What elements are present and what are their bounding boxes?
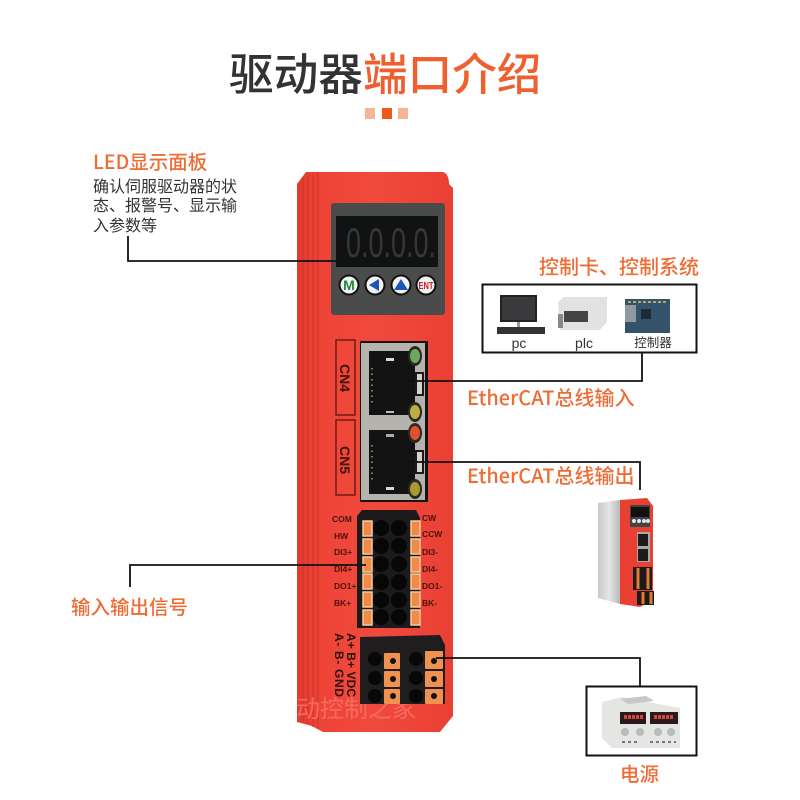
watermark: 动控制之家 <box>296 689 416 724</box>
power labels <box>332 633 358 697</box>
power terminal block <box>360 635 445 704</box>
leader line: LED panel <box>128 236 344 261</box>
icon: plc: plc <box>575 335 593 351</box>
left terminal labels: DI4+ <box>334 564 352 574</box>
LED display panel <box>331 203 445 315</box>
title: 端口介绍 <box>363 38 541 103</box>
left terminal labels <box>332 514 356 608</box>
left terminal labels: DI3+ <box>334 547 352 557</box>
CN5 label: CN5 <box>337 446 353 474</box>
button up <box>390 274 412 296</box>
icon: controller board <box>625 299 672 351</box>
left orange contacts <box>363 521 372 625</box>
port CN4 <box>369 346 424 422</box>
driver device <box>296 172 453 732</box>
leader line: power <box>436 658 640 686</box>
callout: power: 电源 <box>620 758 659 787</box>
callout: EtherCAT output: EtherCAT总线输出 <box>467 460 634 489</box>
title <box>229 38 541 103</box>
device body <box>297 172 453 732</box>
right terminal labels: DI4- <box>422 564 438 574</box>
title decoration squares <box>365 108 408 119</box>
right terminal labels: BK- <box>422 598 437 608</box>
icon: pc: pc <box>512 335 526 351</box>
callout: LED panel: 入参数等 <box>93 212 157 236</box>
button left <box>364 274 386 296</box>
callout: LED panel: LED显示面板 <box>93 146 207 175</box>
callout: control system heading: 控制卡、控制系统 <box>539 251 699 280</box>
left terminal labels: HW <box>334 531 349 541</box>
LED digits: 0.0.0.0. <box>346 219 436 266</box>
power labels: A- B- GND <box>332 633 346 697</box>
power labels: A+ B+ VDC <box>344 633 358 697</box>
button ENT: ENT <box>418 281 434 292</box>
icon: pc <box>497 295 545 351</box>
callout: LED panel <box>93 146 237 236</box>
icon: controller board: 控制器 <box>634 332 672 351</box>
leader line: EtherCAT output <box>408 462 640 490</box>
icon: bench power supply <box>602 696 680 748</box>
leader line: EtherCAT input <box>408 353 642 381</box>
leader line: IO signals <box>130 565 366 587</box>
wire holes <box>373 520 407 625</box>
icon: plc <box>558 297 607 351</box>
CN5 label <box>336 420 355 495</box>
right terminal labels: DO1- <box>422 581 442 591</box>
right terminal labels: CCW <box>422 529 443 539</box>
left terminal labels: BK+ <box>334 598 351 608</box>
left terminal labels: DO1+ <box>334 581 356 591</box>
button M: M <box>343 277 355 293</box>
port CN5 <box>369 423 424 499</box>
callout: LED panel: 确认伺服驱动器的状 <box>93 173 237 197</box>
panel: control devices <box>482 284 696 352</box>
right orange contacts <box>411 521 420 625</box>
CN4 label: CN4 <box>337 364 353 392</box>
left terminal labels: COM <box>332 514 352 524</box>
small driver picture <box>598 498 654 607</box>
callout: IO signals: 输入输出信号 <box>71 591 188 620</box>
IO terminal block <box>357 510 420 628</box>
callout: LED panel: 态、报警号、显示输 <box>93 192 237 216</box>
callout: EtherCAT input: EtherCAT总线输入 <box>467 382 634 411</box>
right terminal labels: CW <box>422 513 437 523</box>
title: 驱动器 <box>229 38 363 103</box>
RJ45 ports <box>360 341 428 502</box>
right terminal labels <box>422 513 443 608</box>
CN4 label <box>336 340 355 415</box>
panel: power supply <box>586 686 696 756</box>
right terminal labels: DI3- <box>422 547 438 557</box>
